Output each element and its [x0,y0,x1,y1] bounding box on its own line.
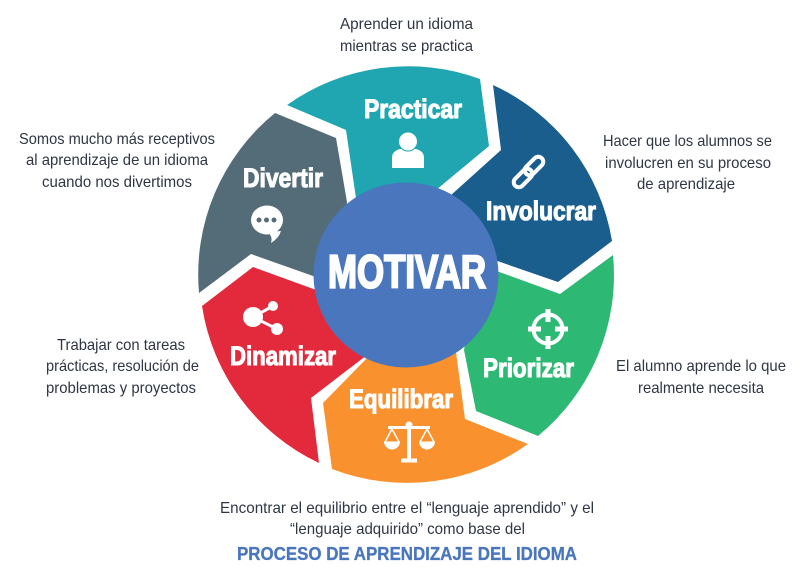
icon: share [243,301,283,335]
segment: Divertir [198,113,347,293]
text: Dinamizar description: Trabajar con tareas [57,337,185,354]
label: Priorizar: Priorizar [483,353,574,383]
text: Dinamizar description: problemas y proyectos [46,380,196,397]
text: Priorizar description: realmente necesita [638,380,764,397]
text: Priorizar description [616,358,786,397]
icon: target [528,309,568,349]
text: Equilibrar description [220,500,594,538]
label: Involucrar: Involucrar [486,196,596,226]
text: Practicar description: Aprender un idioma [340,16,473,33]
label: Dinamizar: Dinamizar [230,341,336,371]
footer heading: PROCESO DE APRENDIZAJE DEL IDIOMA [237,544,577,564]
text: Involucrar description [603,133,772,193]
text: Practicar description: mientras se practica [340,38,473,55]
text: Divertir description [19,131,215,191]
central title: MOTIVAR [328,246,486,298]
segment: Practicar [287,66,489,205]
text: Involucrar description: de aprendizaje [637,176,735,193]
text: Dinamizar description: prácticas, resolución de [46,358,199,375]
central circle: Motivar [314,182,498,368]
icon: scales [384,422,435,462]
segment: Dinamizar [202,267,380,463]
segment: Involucrar [440,85,612,282]
text: Divertir description: cuando nos divertimos [42,174,192,191]
text: Divertir description: al aprendizaje de un idioma [26,152,208,169]
label: Divertir: Divertir [243,163,323,193]
text: Involucrar description: involucren en su proceso [605,155,771,172]
text: Practicar description [340,16,473,55]
text: Equilibrar description: “lenguaje adquirido” como base del [290,521,525,538]
label: Equilibrar: Equilibrar [349,384,453,414]
text: Dinamizar description [46,337,199,397]
text: Divertir description: Somos mucho más receptivos [19,131,215,148]
text: Involucrar description: Hacer que los alumnos se [603,133,772,150]
text: Priorizar description: El alumno aprende lo que [616,358,786,375]
segment: Equilibrar [323,345,528,483]
segment: Priorizar [464,255,614,436]
label: Practicar: Practicar [364,94,462,124]
icon: speech bubble [251,206,283,243]
text: Equilibrar description: Encontrar el equilibrio entre el “lenguaje aprendido” y el [220,500,594,517]
icon: chain link [512,155,545,189]
icon: person [392,132,424,168]
